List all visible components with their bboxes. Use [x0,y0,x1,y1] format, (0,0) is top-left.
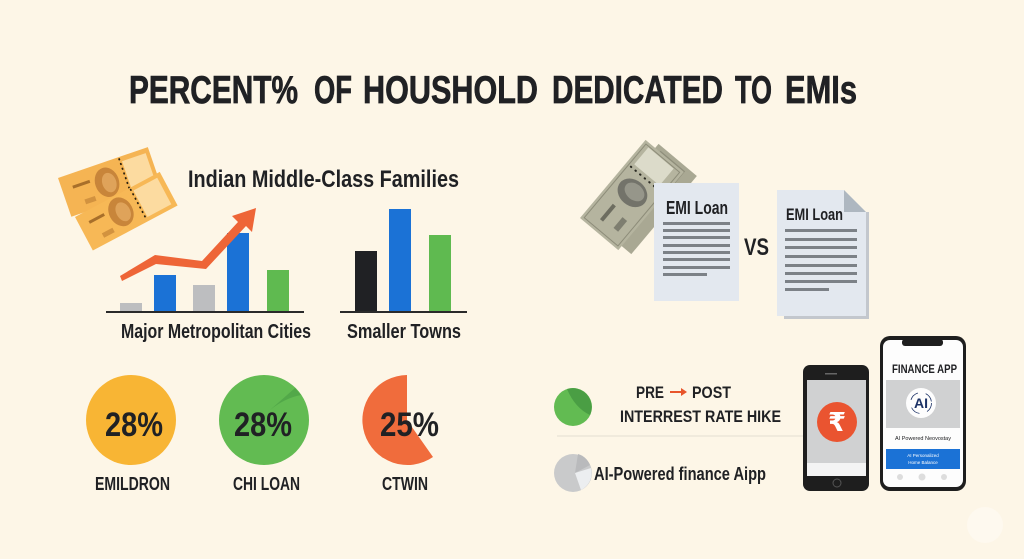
phone: finance app: Home Balance [908,460,938,465]
icon: grey rupee note [580,140,697,254]
icon: orange rupee notes [58,147,178,251]
stat: EMILDRON [86,375,176,494]
heading: Indian Middle-Class Families: Indian Middle-Class Families [188,166,459,193]
icon: grey pie [554,454,592,492]
icon: green pie [554,388,592,426]
title: HOUSHOLD [363,69,538,112]
bar chart: major metropolitan cities [106,233,304,313]
label: smaller towns: Smaller Towns [347,321,461,343]
title: DEDICATED [552,69,723,112]
phone: finance app: AI Powered Neovostay [895,436,951,442]
title: PERCENT% [129,69,298,112]
title [129,69,857,112]
title: OF [314,69,352,112]
stat: CHI LOAN: CHI LOAN [233,474,300,494]
phone: finance app: FINANCE APP [892,364,957,376]
arrow: rising trend [120,208,256,281]
stat: CHI LOAN: 28% [234,406,292,444]
stat: CTWIN: CTWIN [382,474,428,494]
stat: CTWIN [362,375,439,494]
phone: finance app [880,336,966,491]
bar chart: smaller towns [340,209,467,313]
text: pre to post interest rate hike: PRE [636,383,664,402]
document: EMI loan left: EMI Loan [666,198,728,218]
title: EMIs [785,69,857,112]
stat: CHI LOAN [219,375,309,494]
document: EMI loan right: EMI Loan [786,205,843,224]
phone: finance app: AI Personalized [907,453,939,458]
text: pre to post interest rate hike [620,383,781,426]
phone: finance app: AI [914,395,928,411]
stat: EMILDRON: 28% [105,406,163,444]
document: EMI loan left [654,183,739,301]
text: pre to post interest rate hike: INTERREST RATE HIKE [620,407,781,426]
stat: EMILDRON: EMILDRON [95,474,170,494]
icon: rupee coin: ₹ [828,408,846,438]
phone: rupee [803,365,869,491]
text: AI-powered finance app: AI-Powered finance Aipp [594,464,766,484]
document: EMI loan right [777,190,869,319]
title: TO [735,69,772,112]
label: VS: VS [744,234,769,261]
stat: CTWIN: 25% [380,406,439,444]
text: pre to post interest rate hike: POST [692,383,732,402]
label: major metropolitan cities: Major Metropolitan Cities [121,321,311,343]
